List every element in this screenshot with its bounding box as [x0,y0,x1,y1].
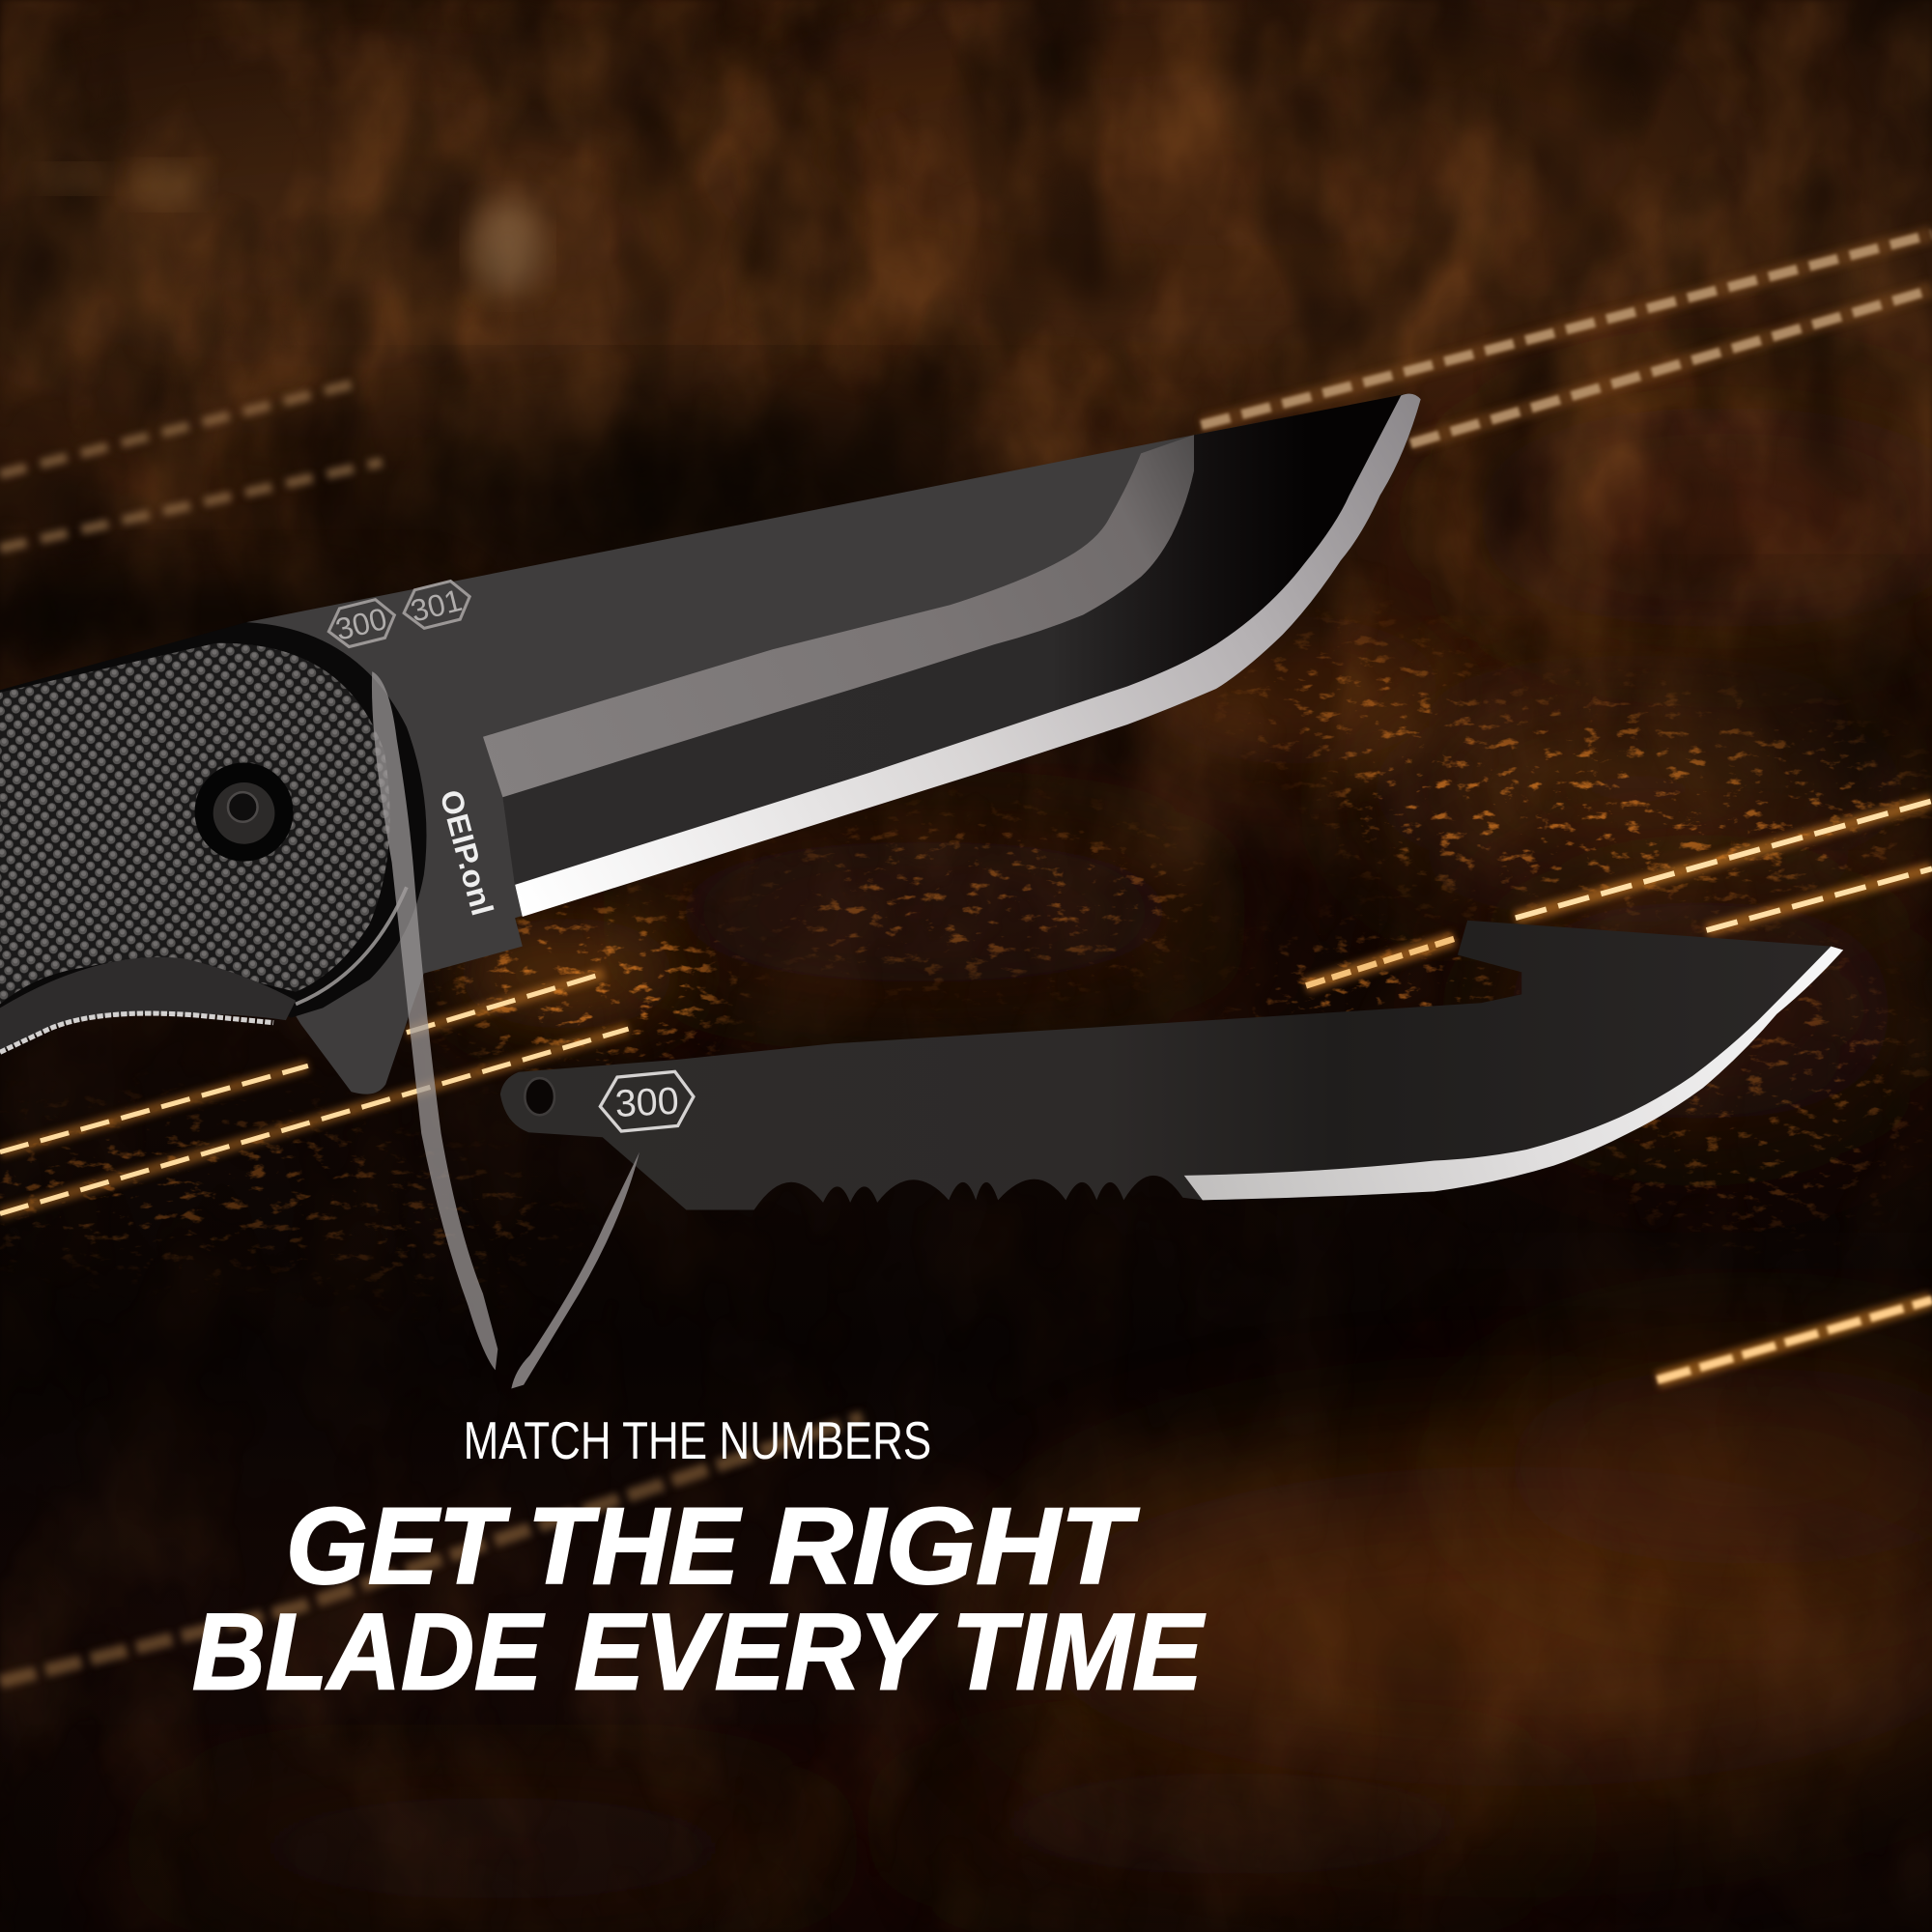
handle scale texture [0,643,390,1005]
title line 2: TIME [952,1591,1206,1713]
badge: 300 [324,596,399,651]
finger choil [0,957,296,1052]
main folding knife [0,394,1421,1094]
knife handle [0,622,426,1047]
pivot screw [195,763,294,862]
badge: 300: 300 [332,601,390,647]
lanyard hole [525,1078,554,1115]
blade shaded face [502,394,1405,887]
blade body [500,921,1843,1210]
badge: 301: 301 [407,582,466,629]
title line 2: EVERY [574,1591,938,1713]
subheading: MATCH THE NUMBERS [464,1410,931,1470]
title line 1: THE [527,1485,742,1606]
badge: 300 [599,1070,696,1132]
callout line to folding knife badge [372,671,497,1370]
title [192,1485,1206,1713]
title line 1: RIGHT [769,1485,1140,1606]
text: OEIP.onl: OEIP.onl [434,786,500,919]
leather stitching [0,234,1932,1682]
title line 1: GET [286,1485,511,1606]
cutting edge [515,394,1421,917]
cutting edge [1184,947,1843,1200]
knife blade [246,394,1421,1094]
replacement gut-hook blade [500,921,1843,1210]
badge: 300: 300 [614,1080,680,1125]
title line 2: BLADE [192,1591,545,1713]
blade bevel [483,435,1194,797]
callout line to blade badge [511,1152,639,1389]
badge: 301 [399,578,474,632]
